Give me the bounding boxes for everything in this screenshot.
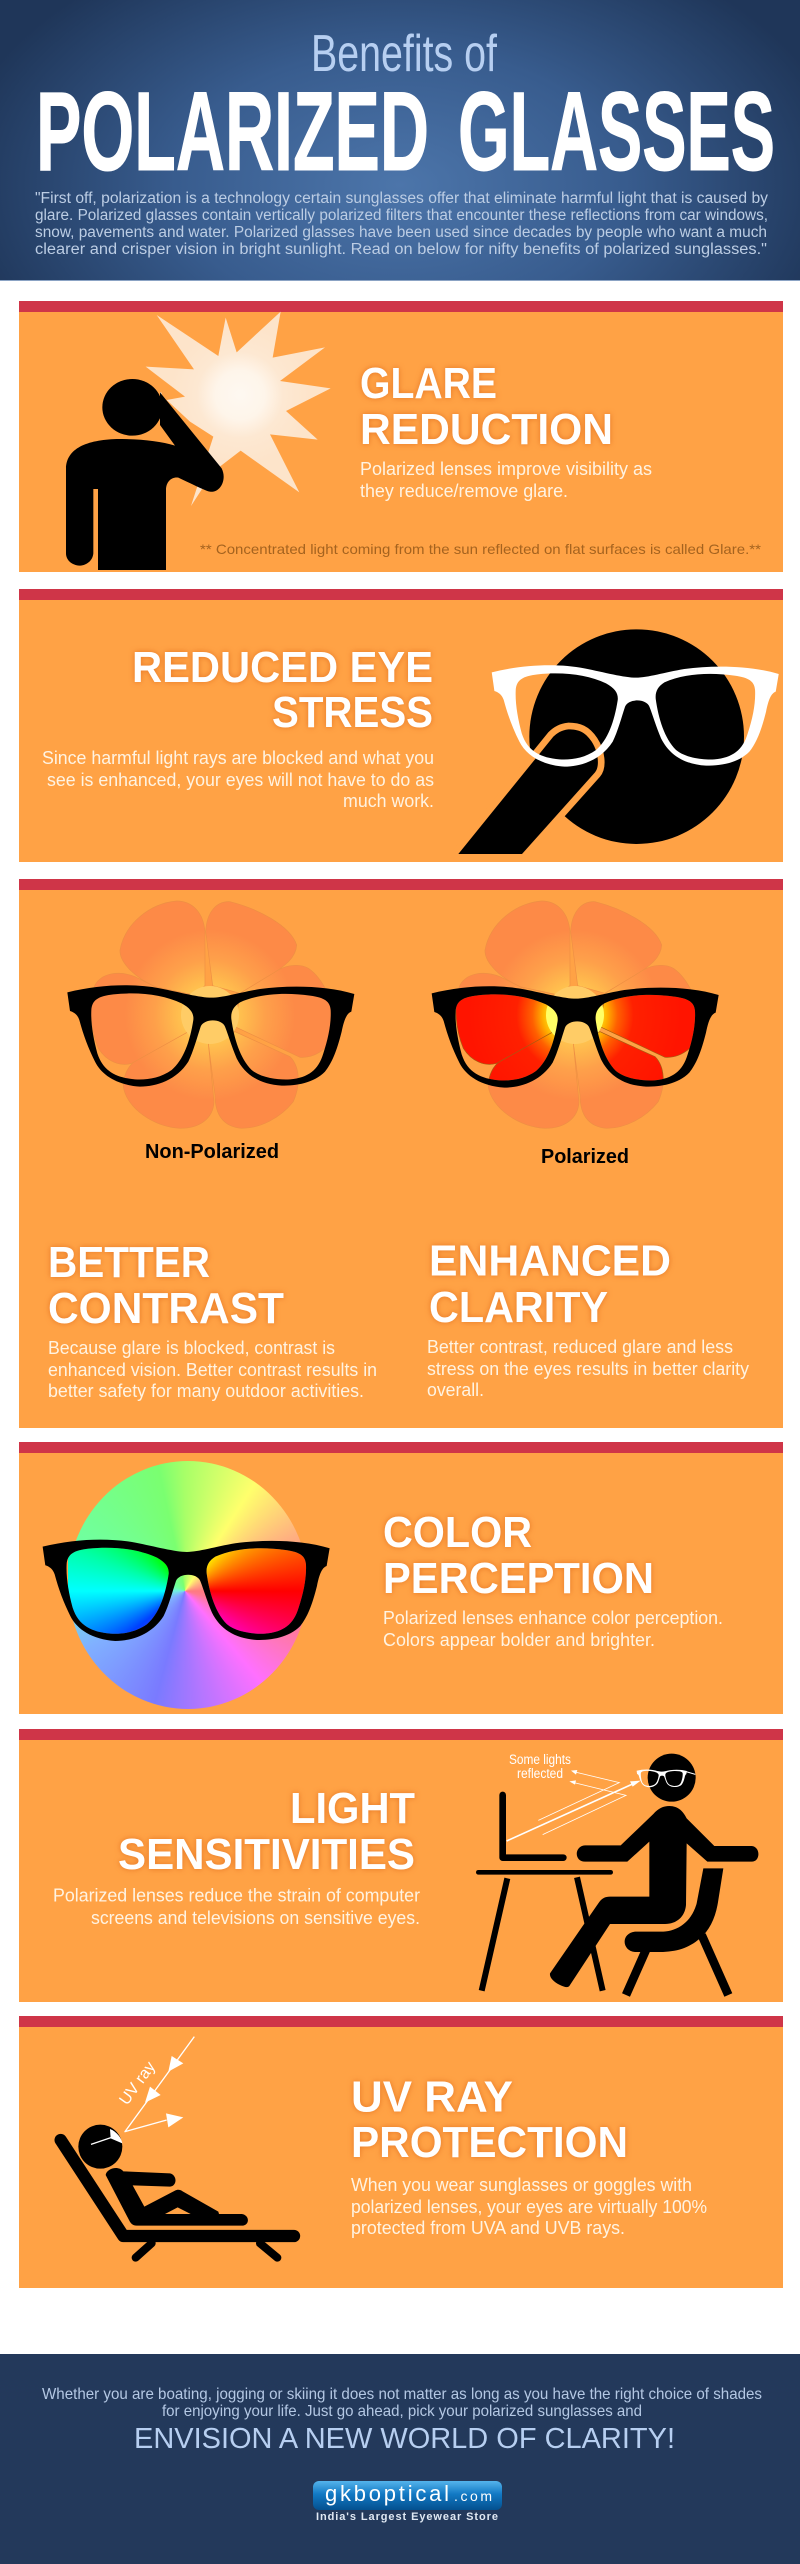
heading: uv ray protection: PROTECTION [351,2118,628,2167]
heading: reduced eye stress: REDUCED EYE [132,643,433,692]
text: uv ray body: polarized lenses, your eyes are virtually 100% [351,2197,707,2217]
label: some lights reflected: Some lights [509,1752,571,1767]
text: color perception body: Colors appear bolder and brighter. [383,1630,655,1650]
heading: glare reduction: REDUCTION [360,405,613,454]
heading: uv ray protection: UV RAY [351,2072,513,2122]
intro paragraph: snow, pavements and water. Polarized glasses have been used since decades by people who want a much [35,224,767,241]
text: enhanced clarity body: stress on the eyes results in better clarity [427,1359,749,1379]
logo: gkboptical.com: India's Largest Eyewear Store [316,2511,498,2523]
panel: better contrast and enhanced clarity [19,879,783,1428]
text: glare body: they reduce/remove glare. [360,481,568,501]
icon: person on lounger with uv rays reflected [61,2037,294,2258]
panel: glare reduction [19,301,783,572]
text: color perception body [383,1608,723,1650]
text: eye stress body: see is enhanced, your eyes will not have to do as [47,770,434,790]
text: glare body: Polarized lenses improve visibility as [360,459,652,479]
heading: uv ray protection [351,2072,628,2167]
intro paragraph: "First off, polarization is a technology certain sunglasses offer that eliminate harmful light that is caused by [35,190,768,207]
heading: better contrast: BETTER [48,1238,210,1287]
label: polarized: Polarized [541,1146,629,1168]
text: eye stress body: Since harmful light rays are blocked and what you [42,748,434,768]
intro paragraph: glare. Polarized glasses contain vertically polarized filters that encounter these reflections from car windows, [35,207,768,224]
heading: color perception [383,1508,654,1603]
label: uv ray: UV ray [116,2059,159,2108]
panel: uv ray protection [19,2016,783,2288]
title: benefits of: Benefits of [311,25,497,83]
icon: polarized glasses over flower [432,901,719,1128]
text: eye stress body [42,748,434,811]
heading: better contrast: CONTRAST [48,1284,284,1333]
logo: gkboptical.com: gkboptical [325,2481,449,2506]
text: better contrast body: better safety for many outdoor activities. [48,1381,364,1401]
header banner [0,0,800,281]
text: light sensitivities body [53,1886,420,1928]
heading: better contrast [48,1238,284,1333]
text: eye stress body: much work. [343,791,434,811]
heading: reduced eye stress [132,643,433,737]
text: better contrast body [48,1338,377,1401]
footer [0,2354,800,2564]
intro paragraph [35,190,768,258]
heading: enhanced clarity: ENHANCED [429,1236,671,1286]
heading: envision a new world of clarity: ENVISION A NEW WORLD OF CLARITY! [134,2423,675,2455]
text: glare body [360,459,652,501]
text: light sensitivities body: Polarized lenses reduce the strain of computer [53,1886,420,1906]
logo: gkboptical.com [313,2481,502,2523]
footnote: definition of glare: ** Concentrated light coming from the sun reflected on flat surfaces is called Glare.** [200,541,762,557]
text: color perception body: Polarized lenses enhance color perception. [383,1608,723,1628]
text: enhanced clarity body: Better contrast, reduced glare and less [427,1337,733,1357]
heading: light sensitivities [118,1784,415,1879]
label: non-polarized: Non-Polarized [145,1141,279,1163]
text: better contrast body: Because glare is blocked, contrast is [48,1338,335,1358]
heading: glare reduction [360,359,613,454]
text: closing message: Whether you are boating, jogging or skiing it does not matter as long as you have the right choice of shades [42,2386,762,2403]
icon: head rubbing eye with white glasses [458,629,779,854]
text: better contrast body: enhanced vision. Better contrast results in [48,1360,377,1380]
heading: glare reduction: GLARE [360,359,497,408]
panel: color perception [19,1442,783,1714]
heading: light sensitivities: LIGHT [290,1784,415,1833]
heading: light sensitivities: SENSITIVITIES [118,1830,415,1879]
text: closing message: for enjoying your life. Just go ahead, pick your polarized sunglasses and [162,2403,642,2420]
icon: person at laptop with light rays [478,1754,758,1995]
label: some lights reflected [509,1752,571,1781]
text: uv ray body [351,2175,707,2238]
intro paragraph: clearer and crisper vision in bright sunlight. Read on below for nifty benefits of polarized sunglasses." [35,241,767,258]
text: light sensitivities body: screens and televisions on sensitive eyes. [91,1908,420,1928]
icon: person shielding eyes from glare [66,312,331,570]
text: enhanced clarity body: overall. [427,1380,484,1400]
icon: non-polarized glasses over flower [67,901,354,1128]
text: enhanced clarity body [427,1337,749,1400]
label: some lights reflected: reflected [517,1766,563,1781]
heading: reduced eye stress: STRESS [272,688,433,737]
panel: reduced eye stress [19,589,783,862]
text: closing message [42,2386,762,2420]
panel: light sensitivities [19,1729,783,2002]
logo: gkboptical.com: .com [454,2488,492,2504]
heading: color perception: PERCEPTION [383,1554,654,1603]
text: uv ray body: When you wear sunglasses or goggles with [351,2175,692,2195]
text: uv ray body: protected from UVA and UVB rays. [351,2218,625,2238]
heading: enhanced clarity [429,1236,671,1332]
heading: enhanced clarity: CLARITY [429,1283,608,1332]
title: polarized glasses: POLARIZED [36,69,429,194]
heading: color perception: COLOR [383,1508,532,1557]
icon: color wheel head with sunglasses [43,1461,330,1709]
